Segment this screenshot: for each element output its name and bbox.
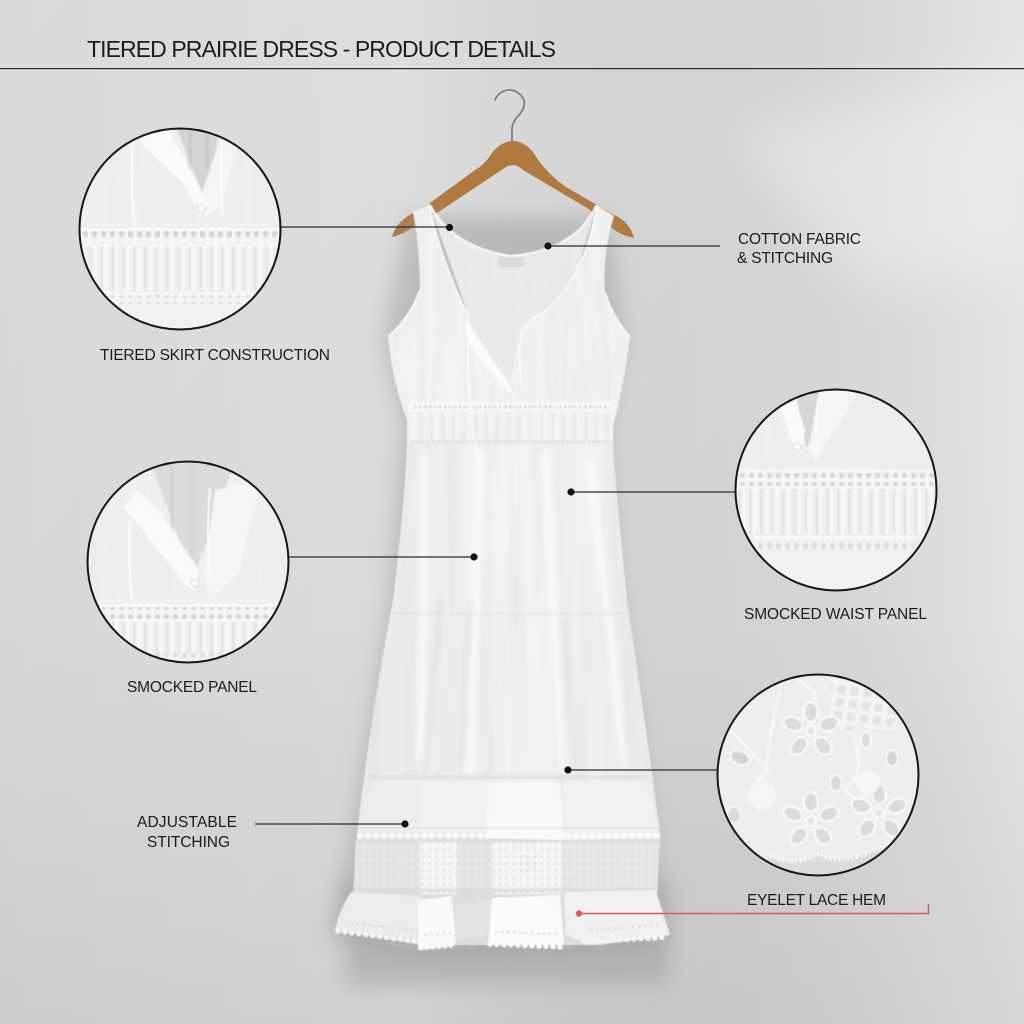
callout line: tiered skirt construction bbox=[281, 224, 453, 231]
label: cotton fabric and stitching: & STITCHING bbox=[737, 250, 833, 267]
circle detail: smocked panel bbox=[86, 460, 290, 664]
waist smocked lace bands bbox=[410, 402, 613, 442]
label: cotton fabric and stitching: COTTON FABRIC bbox=[738, 231, 861, 248]
fold texture bbox=[390, 262, 656, 950]
hanger with hook bbox=[392, 90, 634, 238]
neckline and strap edges bbox=[388, 204, 630, 337]
label: adjustable stitching: ADJUSTABLE bbox=[137, 814, 237, 831]
callout line: eyelet lace bbox=[564, 766, 717, 774]
label tag bbox=[498, 257, 524, 267]
dress shadow bbox=[329, 215, 664, 958]
title rule bbox=[0, 68, 1024, 69]
circle detail: tiered skirt construction bbox=[78, 127, 282, 332]
upper skirt bbox=[357, 444, 660, 850]
label: smocked panel: SMOCKED PANEL bbox=[127, 679, 257, 696]
circle detail: smocked waist panel bbox=[734, 388, 938, 592]
dress back panel behind neckline bbox=[430, 206, 596, 395]
lower smocked panels bbox=[355, 842, 658, 894]
bottom ruffles with eyelet hem bbox=[335, 890, 670, 950]
tier seam bbox=[392, 612, 627, 614]
label: tiered skirt construction: TIERED SKIRT CONSTRUCTION bbox=[100, 347, 330, 364]
callout line: red hem bracket bbox=[576, 904, 928, 917]
bodice bbox=[388, 204, 630, 445]
label: smocked waist panel: SMOCKED WAIST PANEL bbox=[744, 606, 927, 623]
callout line: smocked waist panel bbox=[567, 488, 735, 496]
dress bbox=[330, 204, 675, 955]
placket and button bbox=[465, 320, 522, 470]
callout line: smocked panel bbox=[289, 553, 478, 561]
callout line: adjustable stitching bbox=[255, 820, 409, 828]
upper ruffle bbox=[357, 777, 662, 840]
callout line: cotton fabric bbox=[544, 242, 720, 250]
label: adjustable stitching: STITCHING bbox=[147, 834, 230, 851]
circle detail: eyelet lace hem bbox=[716, 673, 920, 880]
title: TIERED PRAIRIE DRESS - PRODUCT DETAILS bbox=[87, 36, 556, 62]
lower smocked band, dim bbox=[335, 838, 670, 945]
label: eyelet lace hem: EYELET LACE HEM bbox=[747, 892, 886, 909]
